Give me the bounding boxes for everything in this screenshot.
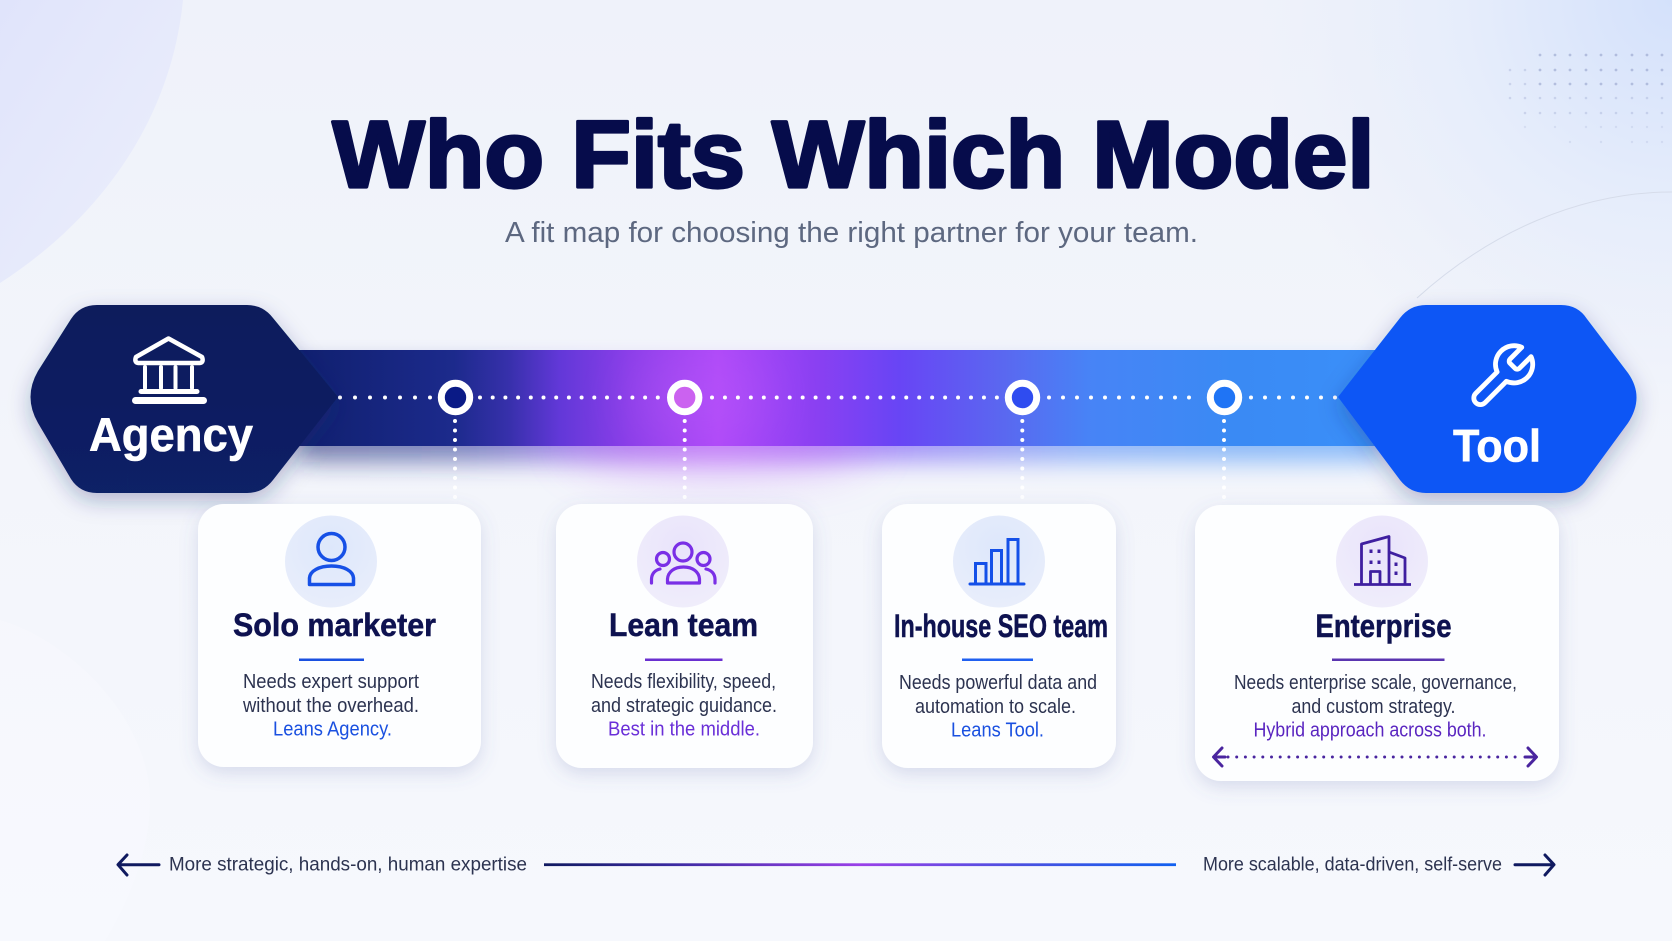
card: solo marketer: Leans Agency.	[273, 718, 392, 740]
card: in-house SEO team: Leans Tool.	[951, 720, 1044, 742]
arrow: right	[1515, 855, 1554, 875]
connector: enterprise	[1222, 421, 1226, 502]
bottom spectrum axis: More strategic, hands-on, human expertise	[169, 854, 527, 876]
card: enterprise	[1195, 505, 1559, 781]
agency hexagon	[30, 305, 338, 493]
connector: lean team	[683, 421, 687, 502]
icon: group of people	[637, 516, 729, 608]
card: enterprise: Hybrid approach across both.	[1254, 720, 1486, 742]
icon: office building	[1336, 516, 1428, 608]
icon: wrench	[1474, 346, 1533, 405]
card: in-house SEO team: In-house SEO team	[894, 608, 1108, 644]
card: lean team: Lean team	[609, 607, 758, 643]
card: enterprise: and custom strategy.	[1292, 696, 1456, 718]
card: in-house SEO team	[882, 504, 1116, 768]
card: enterprise: Needs enterprise scale, governance,	[1234, 672, 1517, 694]
card: enterprise: Enterprise	[1316, 608, 1452, 644]
node: lean team	[670, 383, 699, 412]
node: enterprise	[1210, 383, 1239, 412]
icon: bar chart	[953, 516, 1045, 608]
card: solo marketer	[198, 504, 481, 767]
icon: person	[285, 516, 377, 608]
card: lean team: Best in the middle.	[608, 718, 760, 740]
agency hexagon: Agency	[89, 408, 253, 461]
node: in-house SEO team	[1008, 383, 1037, 412]
arrow: left	[118, 855, 159, 875]
dotted double arrow	[1214, 748, 1536, 766]
card: solo marketer: Needs expert support	[243, 671, 419, 693]
card: lean team: and strategic guidance.	[591, 695, 777, 717]
subtitle: A fit map for choosing the right partner for your team.	[505, 217, 1198, 249]
tool hexagon	[1338, 305, 1636, 493]
bottom spectrum axis	[118, 854, 1554, 876]
card: lean team	[556, 504, 813, 768]
card: solo marketer: without the overhead.	[242, 695, 419, 717]
spectrum bar	[280, 348, 1410, 472]
card: in-house SEO team: Needs powerful data and	[899, 672, 1097, 694]
card: in-house SEO team: automation to scale.	[915, 696, 1076, 718]
card: solo marketer: Solo marketer	[233, 607, 436, 643]
node: solo marketer	[441, 383, 470, 412]
bottom spectrum axis: More scalable, data-driven, self-serve	[1203, 854, 1502, 876]
card: lean team: Needs flexibility, speed,	[591, 671, 776, 693]
title: Who Fits Which Model	[332, 102, 1374, 208]
tool hexagon: Tool	[1453, 420, 1541, 472]
connector: solo marketer	[453, 421, 457, 502]
connector: in-house SEO team	[1020, 421, 1024, 502]
icon: bank building	[135, 338, 204, 400]
